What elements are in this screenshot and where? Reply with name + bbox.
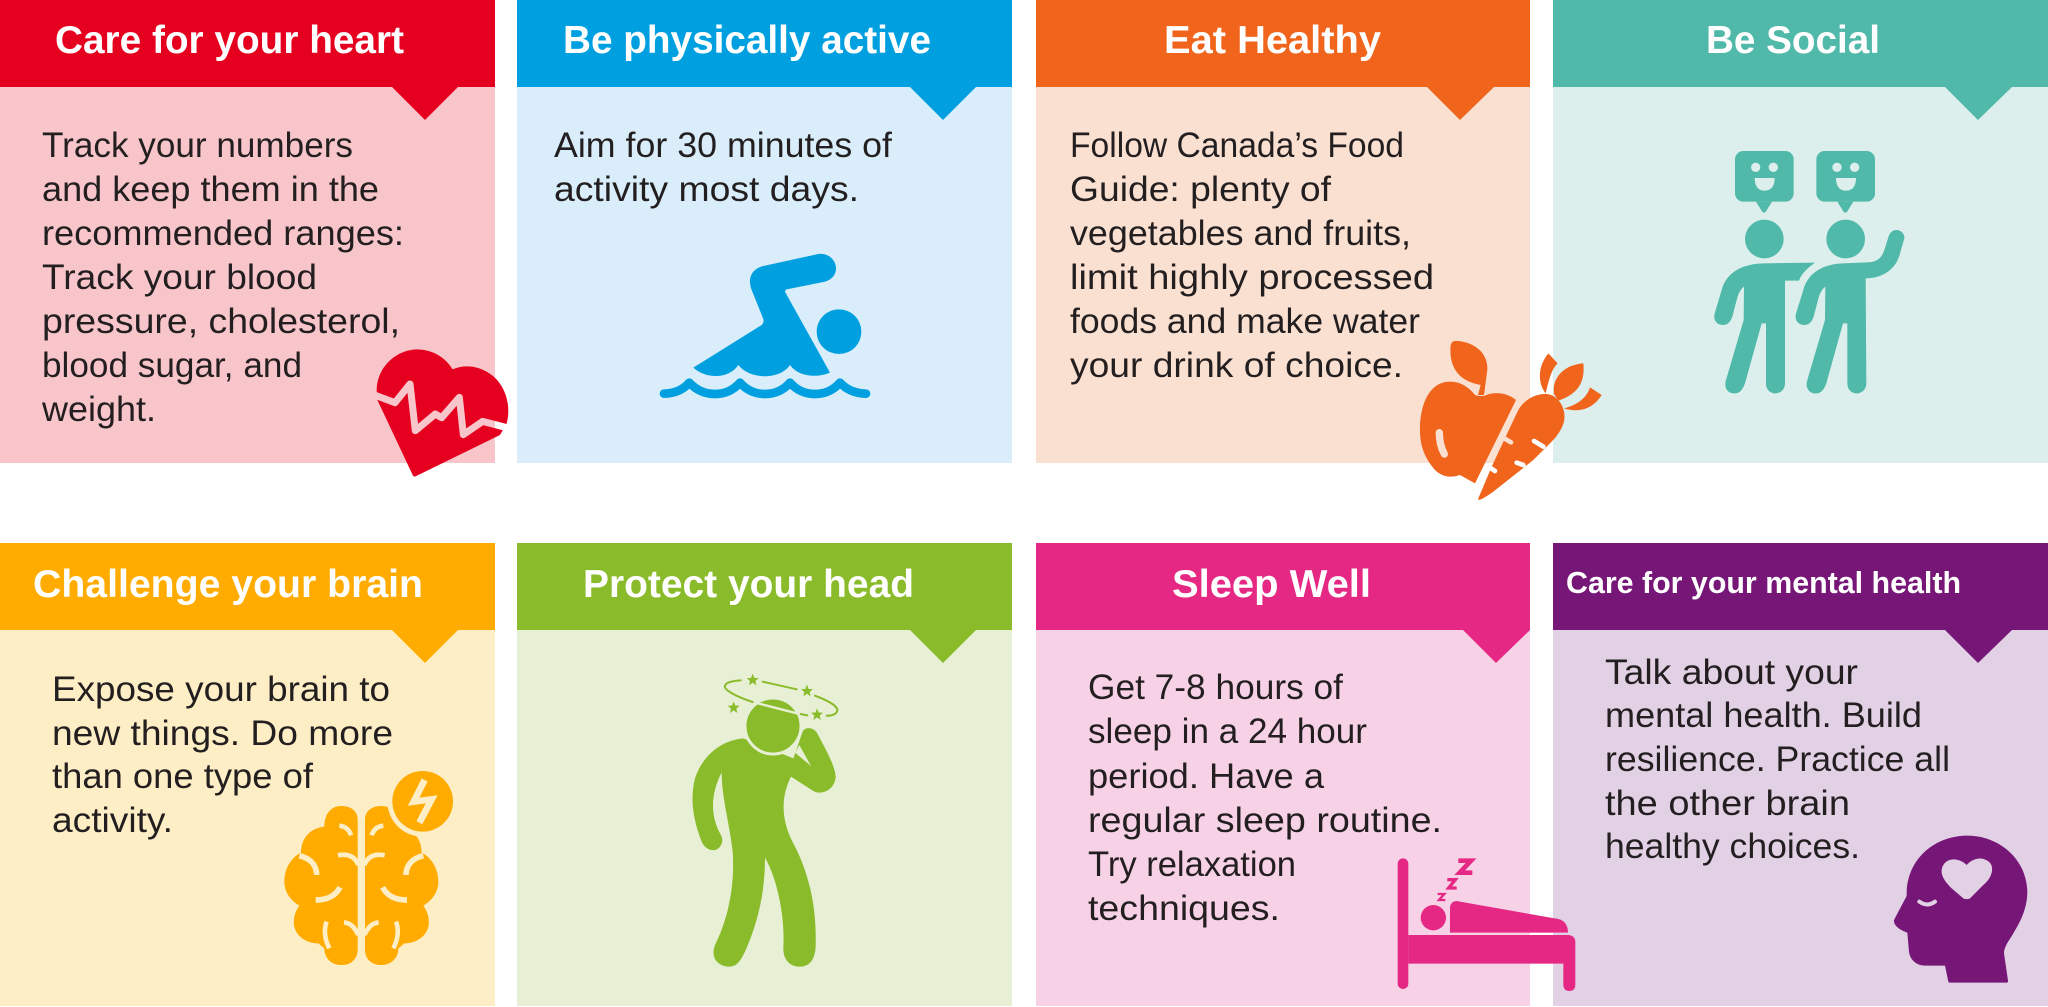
text block: sleep advice: Try relaxation [1088,845,1296,884]
icon: dizzy person [693,674,837,967]
heading: Be physically active: Be physically active [563,19,931,62]
text block: heart advice: pressure, cholesterol, [42,302,400,341]
heading: Care for your mental health: Care for your mental health [1566,565,1961,600]
heading: Protect your head: Protect your head [583,563,914,606]
icon: head with heart [1894,836,2027,983]
panel: Be Social [1553,0,2048,463]
header: Eat Healthy [1036,0,1530,120]
icon: brain with lightning [284,766,458,965]
text block: food advice: Guide: plenty of [1070,170,1331,209]
text block: heart advice: Track your blood [42,258,317,297]
text block: sleep advice: Get 7-8 hours of [1088,668,1343,707]
header: Sleep Well [1036,543,1530,663]
heading: Challenge your brain: Challenge your brain [33,563,423,606]
text block: heart advice: and keep them in the [42,170,379,209]
panel: Protect your head [517,543,1012,1006]
text block: heart advice: recommended ranges: [42,214,404,253]
text block: mental health advice: the other brain [1605,784,1850,823]
panel: Be physically active [517,0,1012,463]
panel: Care for your mental health [1553,543,2048,1006]
panel: Eat Healthy [1036,0,1602,500]
text block: activity advice: Aim for 30 minutes of [554,126,892,165]
panel: Challenge your brain [0,543,495,1006]
text block: mental health advice: Talk about your [1605,653,1858,692]
icon: swimmer [664,254,866,394]
heading: Eat Healthy: Eat Healthy [1164,19,1381,62]
heading: Sleep Well: Sleep Well [1172,563,1371,606]
text block: mental health advice: mental health. Build [1605,696,1922,735]
header: Challenge your brain [0,543,495,663]
icon: heart with pulse [377,349,508,477]
text block: heart advice: Track your numbers [42,126,353,165]
text block: heart advice: weight. [41,390,156,429]
text block: food advice: your drink of choice. [1070,346,1403,385]
text block: brain advice: than one type of [52,757,313,796]
text block: heart advice: blood sugar, and [42,346,302,385]
text block: heart advice [41,126,404,429]
text block: mental health advice: healthy choices. [1605,827,1860,866]
text block: sleep advice: sleep in a 24 hour [1088,712,1367,751]
icon: apple and carrot [1420,341,1602,500]
heading: Be Social: Be Social [1706,19,1880,62]
heading: Care for your heart: Care for your heart [55,19,404,62]
panel: Care for your heart [0,0,508,477]
header: Be Social [1553,0,2048,120]
panel: Sleep Well [1036,543,1575,1006]
text block: food advice: vegetables and fruits, [1070,214,1411,253]
text block: food advice [1070,126,1434,385]
text block: food advice: foods and make water [1070,302,1420,341]
text block: brain advice: activity. [52,801,173,840]
text block: food advice: Follow Canada’s Food [1070,126,1404,165]
text block: brain advice: new things. Do more [52,714,393,753]
text block: sleep advice: period. Have a [1088,757,1325,796]
text block: sleep advice: regular sleep routine. [1088,801,1442,840]
text block: sleep advice [1088,668,1442,928]
text block: mental health advice: resilience. Practice all [1605,740,1950,779]
text block: sleep advice: techniques. [1088,889,1280,928]
text block: food advice: limit highly processed [1070,258,1434,297]
text block: brain advice: Expose your brain to [52,670,390,709]
header: Be physically active [517,0,1012,120]
text block: activity advice: activity most days. [554,170,859,209]
header: Protect your head [517,543,1012,663]
icon: two people talking [1714,151,1904,393]
text block: mental health advice [1605,653,1950,866]
text block: activity advice [554,126,892,209]
header: Care for your mental health [1553,543,2048,663]
text block: brain advice [52,670,393,840]
header: Care for your heart [0,0,495,120]
icon: person sleeping in bed [1398,858,1575,991]
